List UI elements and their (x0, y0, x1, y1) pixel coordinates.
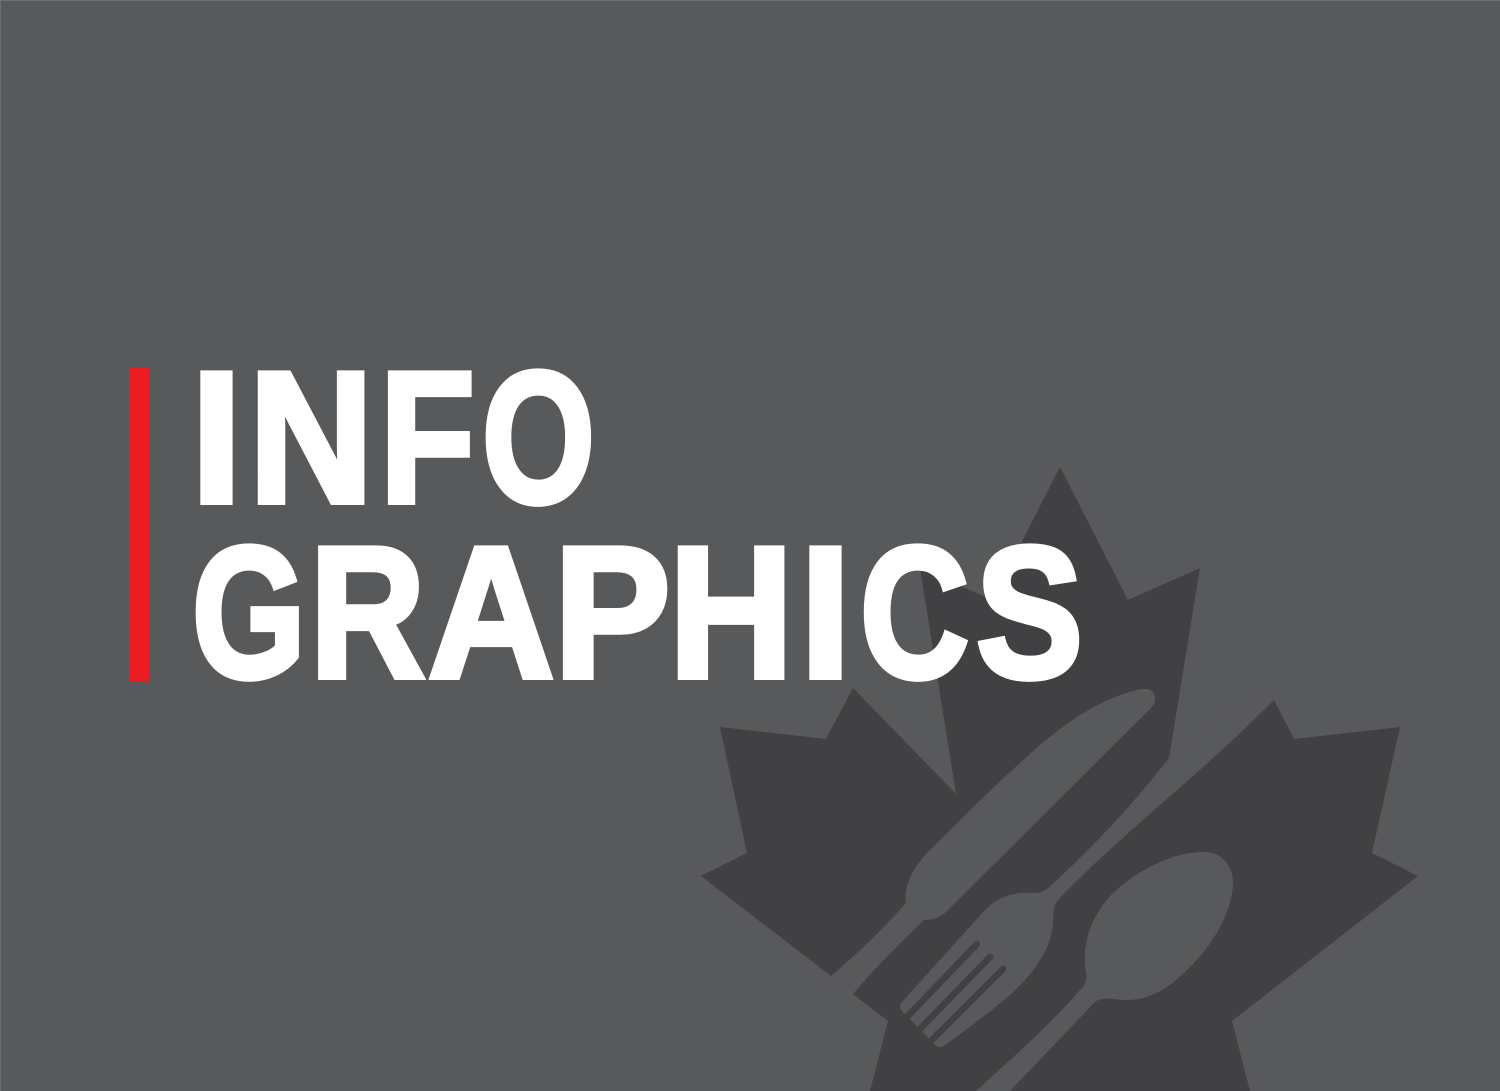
title line: INFO: N (249, 332, 373, 542)
maple leaf silhouette (701, 467, 1418, 1091)
title line: GRAPHICS: R (310, 508, 425, 716)
title line: GRAPHICS: C (860, 508, 969, 716)
title line: GRAPHICS (192, 508, 1083, 716)
title line: GRAPHICS: S (976, 508, 1083, 716)
icon: spoon (976, 852, 1233, 1091)
icon: knife (825, 689, 1155, 994)
title line: GRAPHICS: G (192, 508, 306, 716)
icon: fork (900, 690, 1274, 1047)
title line: INFO: F (380, 332, 475, 542)
title line: INFO: O (482, 332, 595, 542)
title line: INFO (191, 332, 595, 542)
title line: GRAPHICS: A (428, 508, 554, 716)
red accent bar (129, 368, 150, 681)
title line: INFO: I (191, 332, 242, 542)
title line: GRAPHICS: P (554, 508, 671, 716)
fork tine slots (905, 944, 1003, 1043)
title line: GRAPHICS: I (800, 508, 851, 716)
title line: GRAPHICS: H (669, 508, 793, 716)
